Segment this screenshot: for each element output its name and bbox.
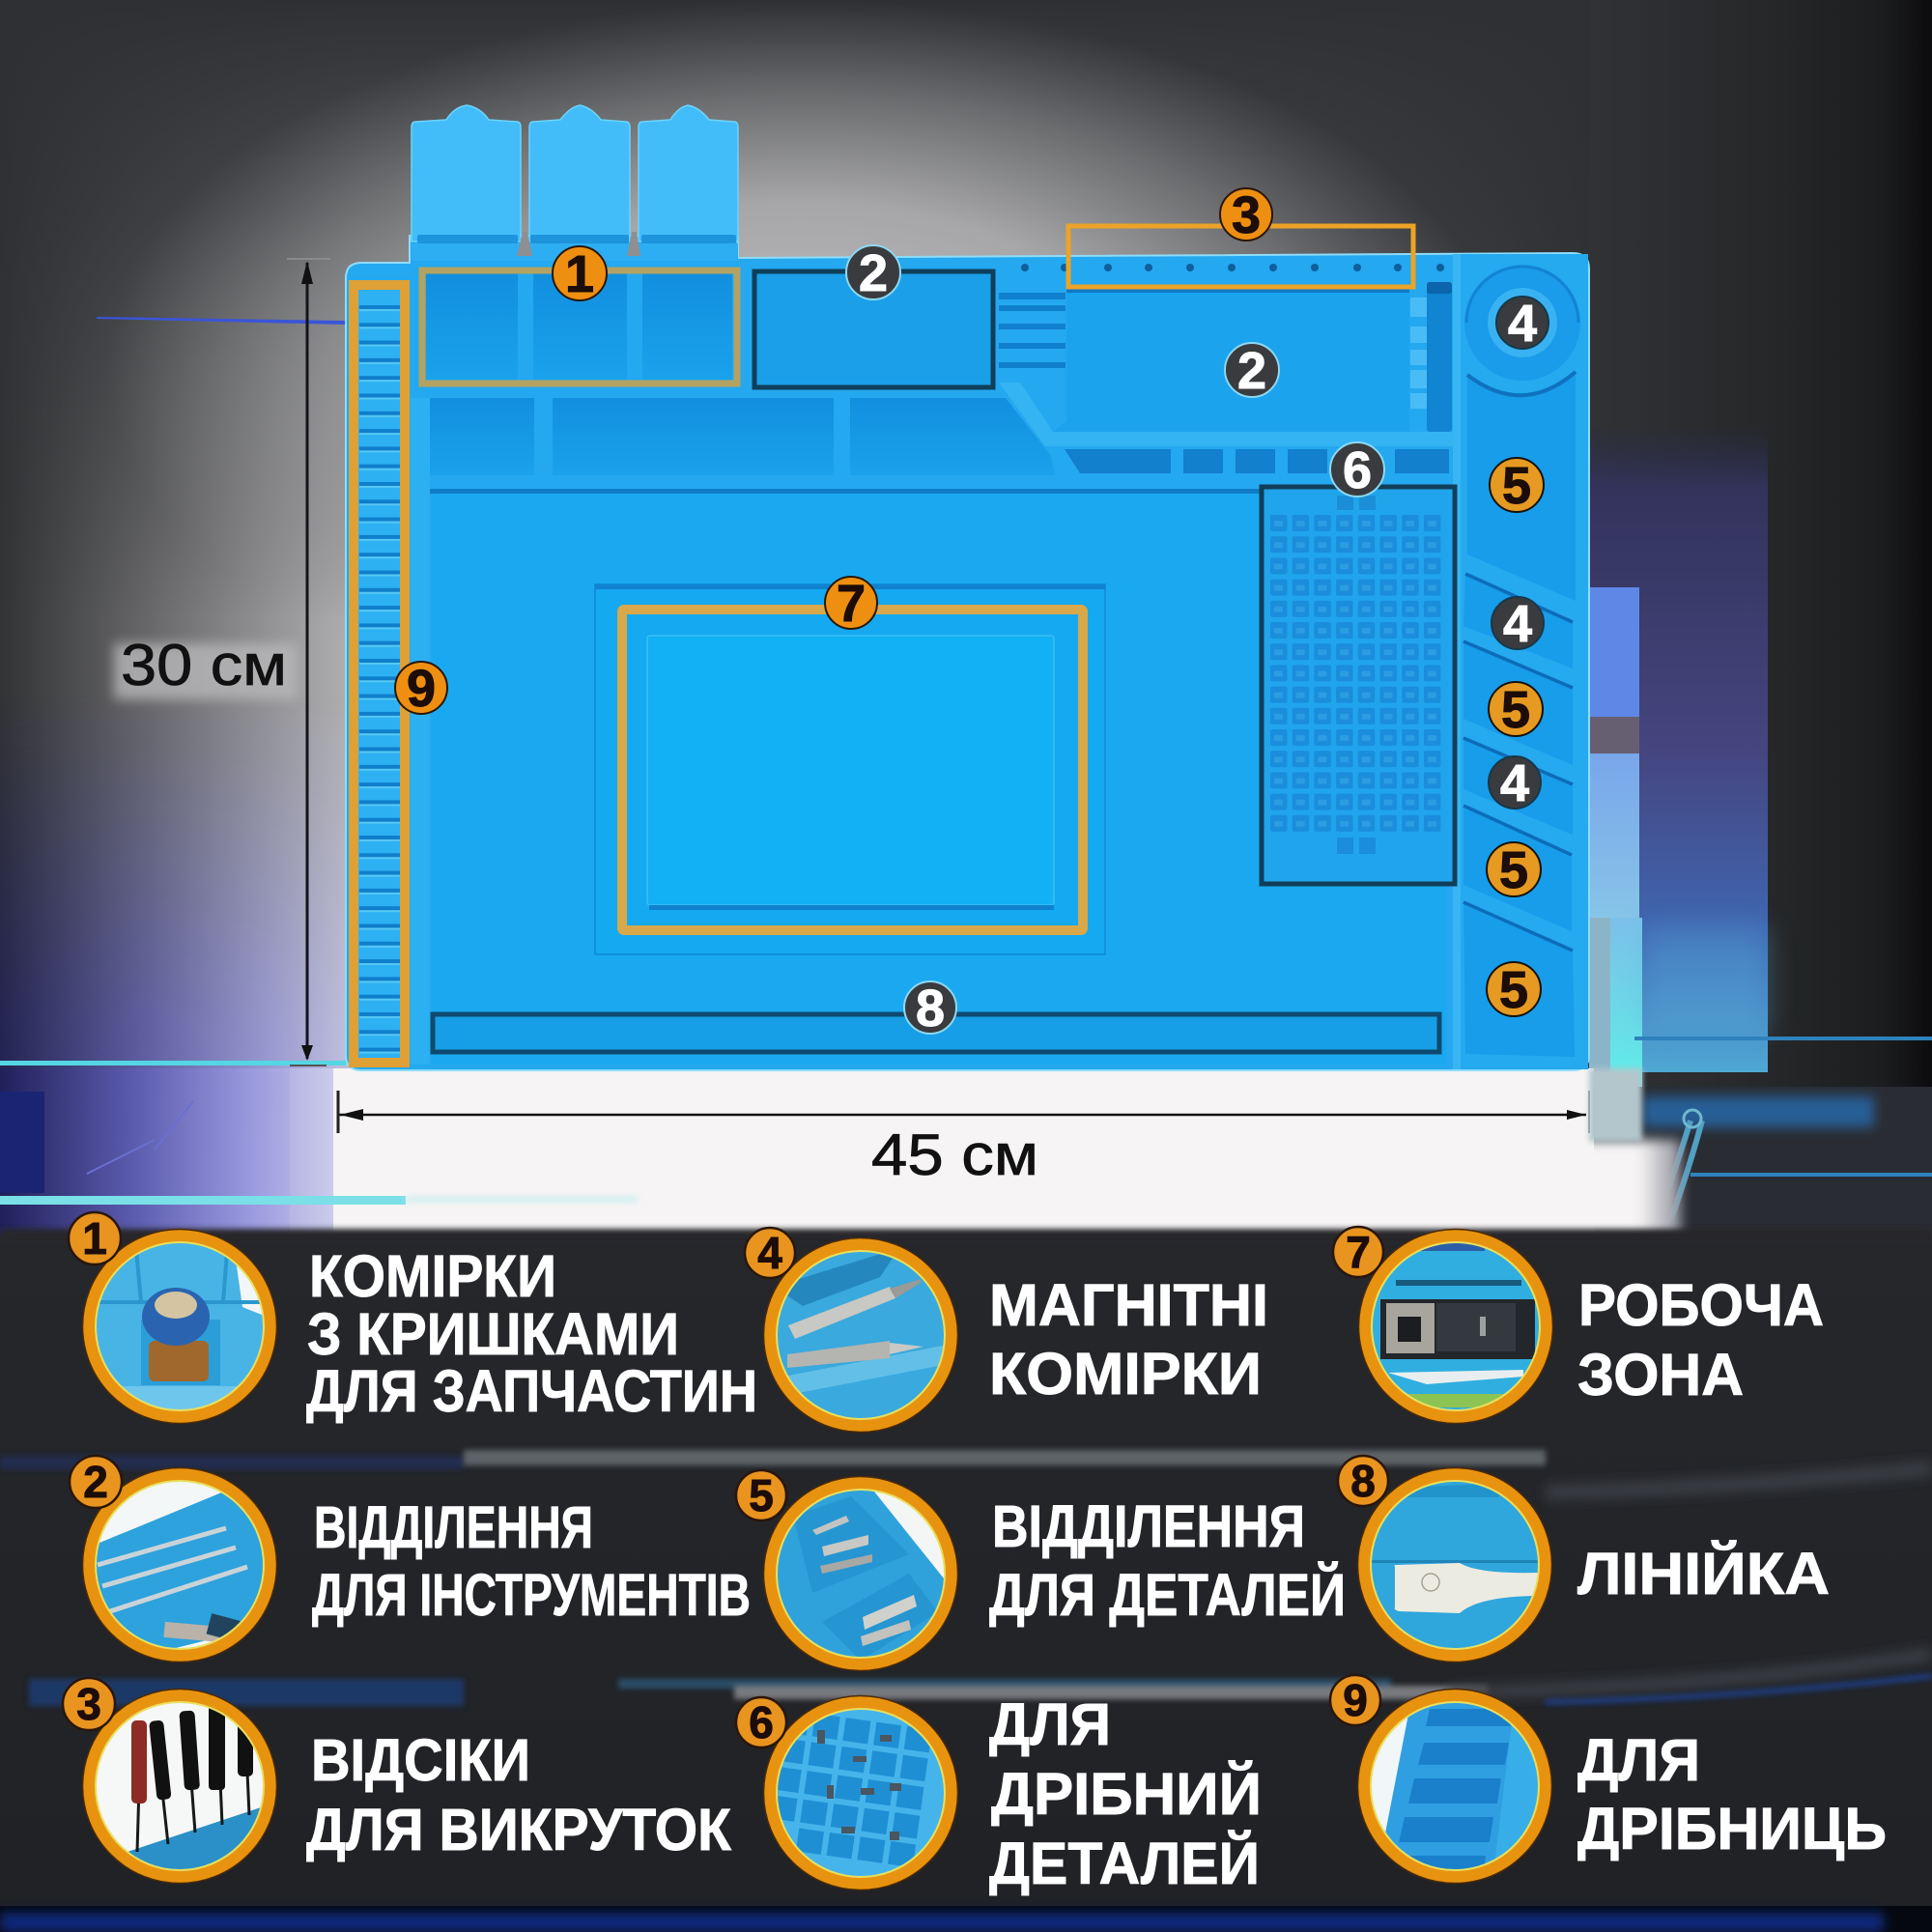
label 4 bbox=[989, 1272, 1268, 1406]
label 7: ЗОНА bbox=[1577, 1342, 1744, 1407]
small tray row bbox=[430, 398, 534, 475]
legend item 6 bbox=[736, 1691, 1262, 1896]
number 5: 5 bbox=[749, 1470, 774, 1520]
main recessed area bbox=[432, 493, 1446, 1065]
label 1: ДЛЯ ЗАПЧАСТИН bbox=[306, 1358, 757, 1424]
photo: jar in cell bbox=[83, 1229, 276, 1424]
label 7: РОБОЧА bbox=[1578, 1272, 1824, 1338]
mat marker 1 bbox=[553, 245, 607, 303]
lid 3 bbox=[639, 105, 738, 242]
photo: screwdrivers bbox=[83, 1689, 276, 1884]
legend item 3 bbox=[63, 1678, 732, 1884]
mat marker 9 bbox=[395, 660, 447, 718]
label 3: ВІДСІКИ bbox=[311, 1727, 530, 1793]
number 7: 7 bbox=[1346, 1227, 1371, 1277]
mat marker 4 circle bbox=[1496, 295, 1548, 353]
mat marker 8: 8 bbox=[916, 980, 945, 1037]
mat marker 5 long slot: 5 bbox=[1502, 457, 1531, 515]
label 6 bbox=[989, 1691, 1262, 1896]
number 2: 2 bbox=[83, 1457, 108, 1507]
number 4 bbox=[745, 1228, 795, 1278]
number 2 bbox=[70, 1456, 122, 1508]
photo: magnetic cells with tips bbox=[763, 1238, 958, 1432]
mat marker 3: 3 bbox=[1232, 186, 1261, 244]
highlight frame 1 bbox=[422, 270, 737, 384]
highlight frame 2 bbox=[754, 271, 993, 387]
highlight frame 3 bbox=[1068, 226, 1413, 287]
label 8: ЛІНІЙКА bbox=[1577, 1540, 1830, 1606]
mat marker 5 slot E bbox=[1487, 961, 1541, 1019]
mat marker 9: 9 bbox=[407, 660, 436, 718]
legend item 7 bbox=[1333, 1227, 1824, 1424]
number 8 bbox=[1338, 1456, 1388, 1506]
legend item 4 bbox=[745, 1228, 1268, 1432]
label 9 bbox=[1577, 1727, 1887, 1861]
mat marker 2 top: 2 bbox=[859, 244, 888, 302]
label 9: ДРІБНИЦЬ bbox=[1577, 1796, 1887, 1861]
mat body bbox=[346, 236, 1589, 1070]
legend item 9 bbox=[1330, 1675, 1887, 1884]
small square cells bbox=[1410, 298, 1427, 409]
legend item 5 bbox=[736, 1470, 1346, 1671]
lid 2 bbox=[529, 105, 630, 242]
label 2: ВІДДІЛЕННЯ bbox=[314, 1494, 593, 1560]
mat marker 7 bbox=[825, 575, 877, 633]
number 4: 4 bbox=[757, 1228, 782, 1278]
highlight frame 8 bbox=[433, 1014, 1439, 1052]
label 9: ДЛЯ bbox=[1577, 1727, 1700, 1793]
mat marker 2 lower: 2 bbox=[1237, 342, 1266, 400]
mat marker 2 lower bbox=[1225, 342, 1279, 400]
left ruler strip bbox=[358, 290, 403, 1059]
lower small cells bbox=[1065, 449, 1449, 473]
right column slots bbox=[1459, 254, 1588, 1069]
photo: parts compartment bbox=[763, 1476, 958, 1671]
mat marker 4 circle: 4 bbox=[1508, 295, 1537, 353]
dimension: 30 cm height bbox=[114, 259, 330, 1065]
long slot bbox=[1427, 282, 1452, 432]
label 7 bbox=[1577, 1272, 1824, 1407]
dimension: 45 cm width bbox=[338, 1091, 1589, 1187]
photo: phone board on mat bbox=[1358, 1229, 1553, 1424]
ruler strip bottom bbox=[434, 1015, 1438, 1051]
mat marker 8 bbox=[904, 980, 956, 1037]
number 5 bbox=[736, 1470, 786, 1520]
background bbox=[0, 0, 1932, 1236]
mat marker 4 slot C: 4 bbox=[1500, 754, 1529, 812]
legend item 8 bbox=[1338, 1456, 1830, 1662]
label 6: ДЛЯ bbox=[989, 1691, 1111, 1757]
label 2 bbox=[312, 1494, 751, 1628]
large tool compartment bbox=[1053, 292, 1409, 432]
mat marker 6 bbox=[1330, 441, 1384, 499]
mat marker 5 slot E: 5 bbox=[1499, 961, 1528, 1019]
highlight frame 7 bbox=[622, 610, 1083, 930]
number 3 bbox=[63, 1678, 115, 1730]
mat marker 6: 6 bbox=[1343, 441, 1372, 499]
label 1: КОМІРКИ bbox=[309, 1243, 556, 1309]
label 4: КОМІРКИ bbox=[989, 1341, 1262, 1406]
legend item 1 bbox=[69, 1212, 757, 1424]
label 5: ВІДДІЛЕННЯ bbox=[992, 1493, 1305, 1559]
mat marker 1: 1 bbox=[565, 245, 594, 303]
ribs bbox=[999, 293, 1065, 368]
lid 1 bbox=[412, 105, 521, 242]
work area frames bbox=[595, 584, 1105, 954]
dimension: 30 cm height: 30 см bbox=[121, 633, 287, 697]
mat marker 4 slot A bbox=[1492, 595, 1544, 653]
small parts grid bbox=[1264, 490, 1452, 881]
legend item 2 bbox=[70, 1456, 751, 1662]
number 1 bbox=[69, 1212, 121, 1264]
label 3 bbox=[306, 1727, 732, 1862]
label 5 bbox=[989, 1493, 1346, 1628]
photo: tool compartment bbox=[83, 1468, 276, 1662]
mat marker 5 slot B bbox=[1489, 681, 1543, 739]
label 2: ДЛЯ ІНСТРУМЕНТІВ bbox=[312, 1562, 751, 1628]
mat marker 2 top bbox=[846, 244, 900, 302]
mat marker 4 slot C bbox=[1489, 754, 1541, 812]
number 9 bbox=[1330, 1675, 1380, 1725]
dark legend panel bbox=[0, 1229, 1932, 1932]
photo: small parts grid bbox=[763, 1696, 958, 1889]
label 6: ДЕТАЛЕЙ bbox=[989, 1830, 1260, 1896]
dimension: 45 cm width: 45 см bbox=[871, 1122, 1038, 1187]
silicone mat bbox=[346, 105, 1589, 1070]
label 1: З КРИШКАМИ bbox=[307, 1301, 679, 1367]
number 6 bbox=[736, 1697, 786, 1747]
number 9: 9 bbox=[1343, 1675, 1368, 1725]
mat marker 7: 7 bbox=[837, 575, 866, 633]
highlight frame 9 bbox=[354, 285, 405, 1063]
mat marker 3 bbox=[1220, 186, 1272, 244]
photo: small slots bbox=[1358, 1689, 1551, 1884]
mat marker 5 slot D bbox=[1487, 841, 1541, 899]
ridge slanted bbox=[999, 383, 1459, 446]
label 5: ДЛЯ ДЕТАЛЕЙ bbox=[989, 1561, 1346, 1628]
tool compartment left bbox=[755, 272, 992, 386]
number 7 bbox=[1333, 1227, 1383, 1277]
photo: spatula on ruler bbox=[1358, 1468, 1551, 1662]
label 3: ДЛЯ ВИКРУТОК bbox=[306, 1797, 732, 1862]
label 6: ДРІБНИЙ bbox=[991, 1760, 1262, 1827]
mat marker 5 slot B: 5 bbox=[1501, 681, 1530, 739]
highlight frame 6 bbox=[1262, 487, 1455, 884]
lidded cells bbox=[426, 273, 518, 380]
number 1: 1 bbox=[82, 1213, 107, 1264]
mat marker 5 slot D: 5 bbox=[1499, 841, 1528, 899]
number 6: 6 bbox=[749, 1697, 774, 1747]
mat marker 5 long slot bbox=[1490, 457, 1544, 515]
number 3: 3 bbox=[76, 1679, 101, 1729]
number 8: 8 bbox=[1350, 1456, 1376, 1506]
label 4: МАГНІТНІ bbox=[989, 1272, 1268, 1338]
label 1 bbox=[306, 1243, 757, 1424]
screw holes bbox=[1021, 264, 1444, 271]
mat marker 4 slot A: 4 bbox=[1503, 595, 1532, 653]
